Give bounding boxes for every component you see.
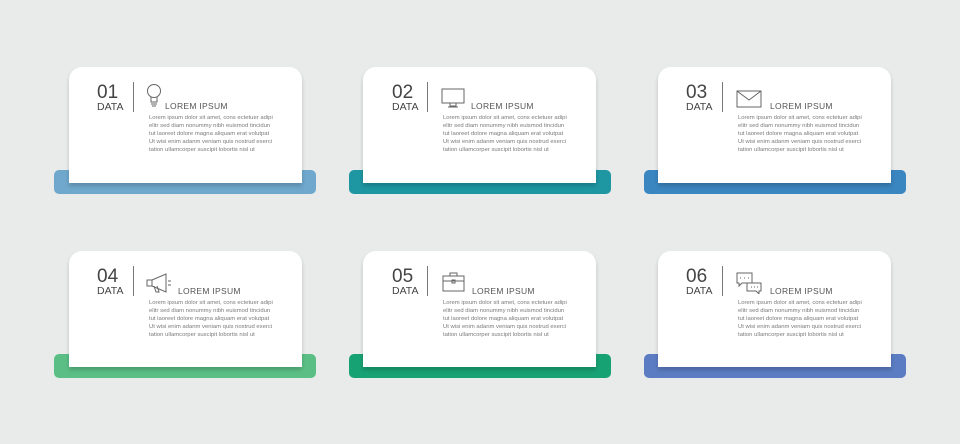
body text: tut laoreet dolore magna aliquam erat volutpat — [149, 316, 269, 322]
icon: chat bubbles — [736, 272, 762, 294]
label DATA: DATA — [686, 285, 712, 297]
body text: tut laoreet dolore magna aliquam erat volutpat — [738, 316, 858, 322]
body text: Ut wisi enim adanm veniam quis nostrud exerci — [149, 324, 272, 330]
body text: elitr sed diam nonummy nibh euismod tincidun — [149, 308, 270, 314]
panel: card 01 — [69, 67, 302, 183]
body text: elitr sed diam nonummy nibh euismod tincidun — [443, 123, 564, 129]
panel: card 03 — [658, 67, 891, 183]
body text: Ut wisi enim adanm veniam quis nostrud exerci — [738, 139, 861, 145]
number 03: 03 — [686, 82, 707, 103]
body text: Ut wisi enim adanm veniam quis nostrud exerci — [149, 139, 272, 145]
number 04: 04 — [97, 266, 118, 287]
label DATA: DATA — [392, 101, 418, 113]
body text: Lorem ipsum dolor sit amet, cons ectetuer adipi — [443, 115, 567, 121]
body text: tation ullamcorper suscipit lobortis nisl ut — [149, 147, 255, 153]
icon: megaphone — [146, 273, 171, 293]
body text: Lorem ipsum dolor sit amet, cons ectetuer adipi — [738, 115, 862, 121]
body text — [443, 115, 567, 153]
label DATA: DATA — [392, 285, 418, 297]
body text: Lorem ipsum dolor sit amet, cons ectetuer adipi — [738, 300, 862, 306]
heading: LOREM IPSUM — [178, 286, 241, 296]
body text: tation ullamcorper suscipit lobortis nisl ut — [149, 332, 255, 338]
panel: card 02 — [363, 67, 596, 183]
panel: card 05 — [363, 251, 596, 367]
body text: tut laoreet dolore magna aliquam erat volutpat — [443, 316, 563, 322]
body text: tut laoreet dolore magna aliquam erat volutpat — [738, 131, 858, 137]
body text: Ut wisi enim adanm veniam quis nostrud exerci — [443, 324, 566, 330]
heading: LOREM IPSUM — [165, 101, 228, 111]
body text: Lorem ipsum dolor sit amet, cons ectetuer adipi — [443, 300, 567, 306]
body text: tation ullamcorper suscipit lobortis nisl ut — [738, 332, 844, 338]
body text — [149, 115, 273, 153]
panel: card 06 — [658, 251, 891, 367]
bar: 04 — [54, 354, 316, 378]
body text: tation ullamcorper suscipit lobortis nisl ut — [443, 332, 549, 338]
body text: tation ullamcorper suscipit lobortis nisl ut — [738, 147, 844, 153]
icon: light bulb — [147, 84, 161, 106]
body text: Lorem ipsum dolor sit amet, cons ectetuer adipi — [149, 115, 273, 121]
number 01: 01 — [97, 82, 118, 103]
body text: elitr sed diam nonummy nibh euismod tincidun — [738, 308, 859, 314]
body text: Lorem ipsum dolor sit amet, cons ectetuer adipi — [149, 300, 273, 306]
body text: Ut wisi enim adanm veniam quis nostrud exerci — [738, 324, 861, 330]
icon: envelope — [736, 90, 762, 108]
body text — [443, 300, 567, 338]
heading: LOREM IPSUM — [472, 286, 535, 296]
heading: LOREM IPSUM — [770, 101, 833, 111]
body text: elitr sed diam nonummy nibh euismod tincidun — [149, 123, 270, 129]
bar: 05 — [349, 354, 611, 378]
bar: 03 — [644, 170, 906, 194]
body text: tation ullamcorper suscipit lobortis nisl ut — [443, 147, 549, 153]
icon: monitor — [442, 88, 464, 108]
number 02: 02 — [392, 82, 413, 103]
body text — [738, 115, 862, 153]
body text: tut laoreet dolore magna aliquam erat volutpat — [443, 131, 563, 137]
bar: 01 — [54, 170, 316, 194]
body text — [149, 300, 273, 338]
bar: 06 — [644, 354, 906, 378]
label DATA: DATA — [97, 101, 123, 113]
panel: card 04 — [69, 251, 302, 367]
label DATA: DATA — [97, 285, 123, 297]
heading: LOREM IPSUM — [770, 286, 833, 296]
label DATA: DATA — [686, 101, 712, 113]
body text: elitr sed diam nonummy nibh euismod tincidun — [738, 123, 859, 129]
number 06: 06 — [686, 266, 707, 287]
bar: 02 — [349, 170, 611, 194]
body text — [738, 300, 862, 338]
body text: elitr sed diam nonummy nibh euismod tincidun — [443, 308, 564, 314]
body text: tut laoreet dolore magna aliquam erat volutpat — [149, 131, 269, 137]
heading: LOREM IPSUM — [471, 101, 534, 111]
body text: Ut wisi enim adanm veniam quis nostrud exerci — [443, 139, 566, 145]
number 05: 05 — [392, 266, 413, 287]
icon: briefcase — [442, 272, 464, 292]
